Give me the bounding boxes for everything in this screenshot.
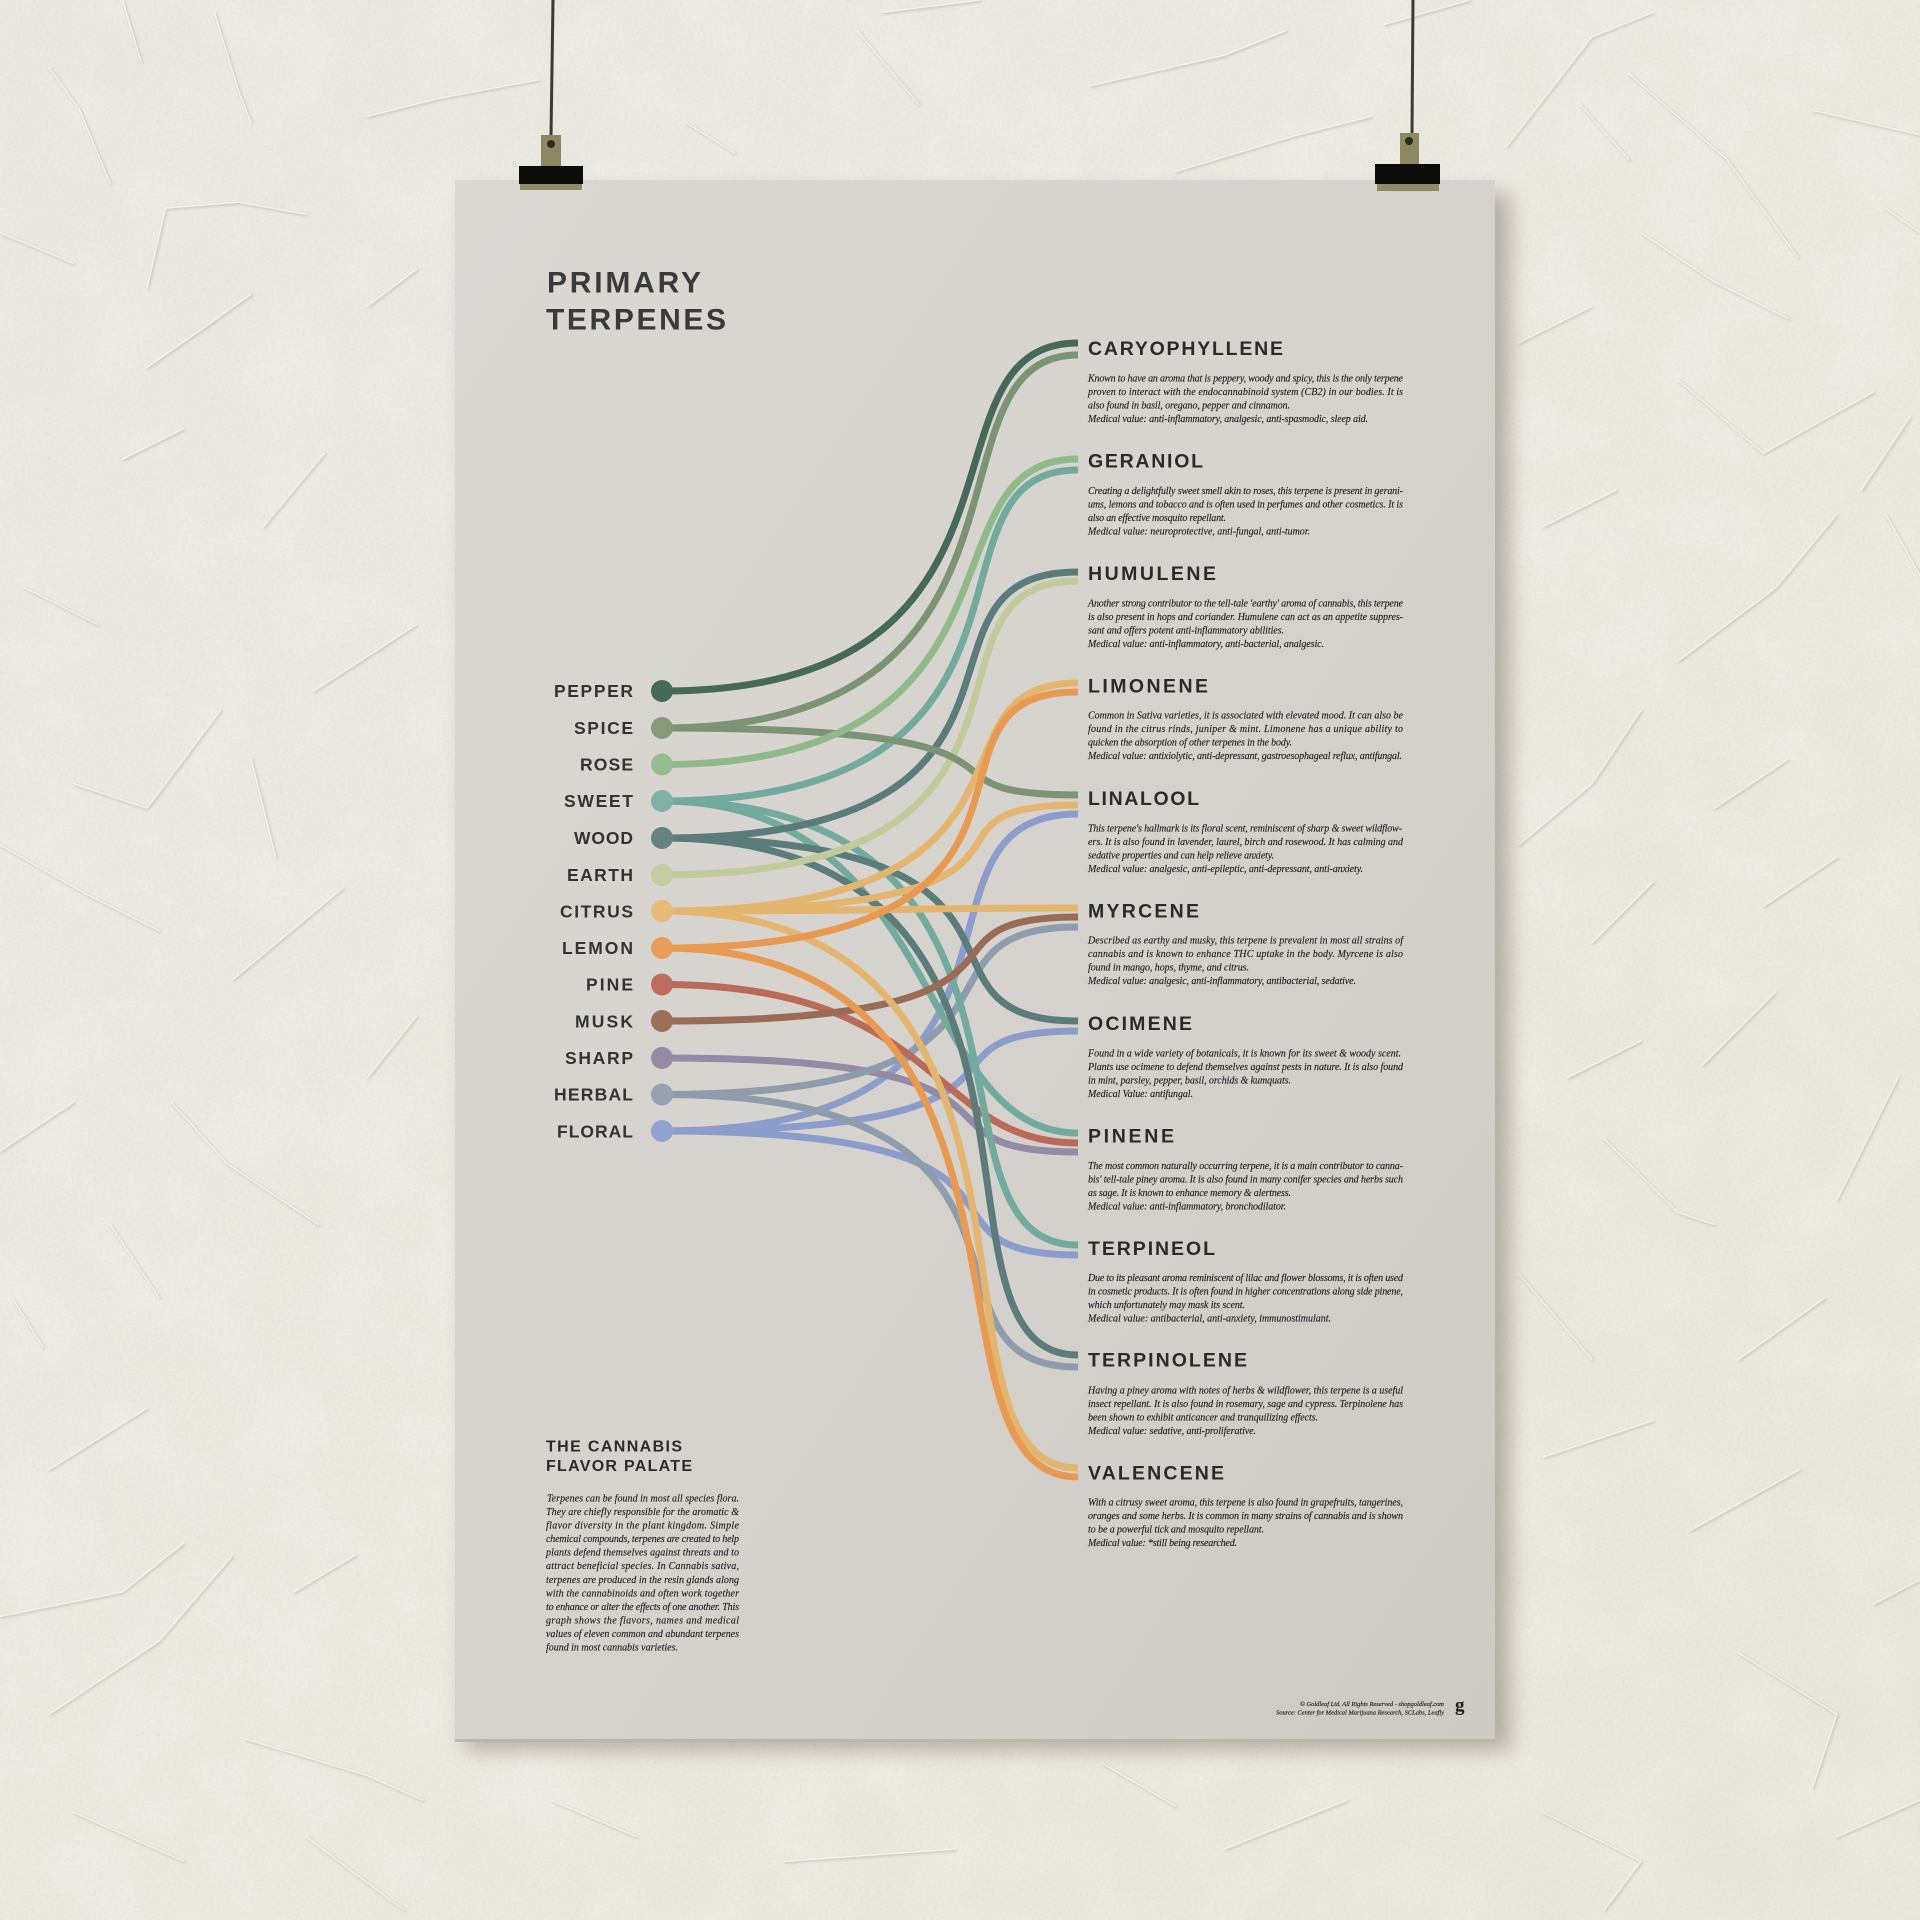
terpene: terpinolene: been shown to exhibit anticancer and tranquilizing effects.	[1088, 1412, 1318, 1424]
terpene: ocimene: Medical Value: antifungal.	[1087, 1089, 1193, 1100]
flavor labels: PINE	[586, 974, 633, 994]
terpene: humulene: Another strong contributor to the tell-tale 'earthy' aroma of cannabis, this terpene	[1087, 598, 1404, 610]
terpene: caryophyllene: Medical value: anti-inflammatory, analgesic, anti-spasmodic, sleep aid.	[1087, 414, 1368, 425]
terpene: terpinolene: Having a piney aroma with notes of herbs & wildflower, this terpene is a useful	[1087, 1386, 1403, 1396]
terpene: myrcene: MYRCENE	[1088, 900, 1199, 922]
terpene: terpinolene: Medical value: sedative, anti-proliferative.	[1087, 1426, 1256, 1437]
terpene: geraniol: GERANIOL	[1088, 450, 1203, 472]
flavor labels: PEPPER	[554, 681, 633, 701]
intro: the cannabis flavor palate: to enhance or alter the effects of one another. This	[546, 1602, 739, 1613]
terpene: linalool: This terpene's hallmark is its floral scent, reminiscent of sharp & sweet wildflow-	[1088, 824, 1402, 834]
terpene: valencene: to be a powerful tick and mosquito repellant.	[1088, 1524, 1264, 1536]
terpene: valencene	[1087, 1462, 1403, 1549]
terpene: humulene	[1087, 563, 1404, 650]
flavor labels	[554, 681, 633, 1141]
terpene: ocimene: in mint, parsley, pepper, basil, orchids & kumquats.	[1088, 1076, 1291, 1086]
terpene: geraniol: also an effective mosquito repellant.	[1088, 513, 1226, 524]
terpene: linalool: Medical value: analgesic, anti-epileptic, anti-depressant, anti-anxiety.	[1087, 864, 1363, 875]
terpene: myrcene: found in mango, hops, thyme, and citrus.	[1088, 962, 1249, 974]
terpene: terpinolene: insect repellant. It is also found in rosemary, sage and cypress. Terpinolene has	[1088, 1399, 1403, 1410]
terpene: terpineol: Medical value: antibacterial, anti-anxiety, immunostimulant.	[1087, 1314, 1331, 1324]
footer credits: © Goldleaf Ltd. All Rights Reserved - shopgoldleaf.com	[1300, 1701, 1444, 1708]
intro: the cannabis flavor palate: flavor diversity in the plant kingdom. Simple	[546, 1521, 740, 1532]
terpene: linalool: ers. It is also found in lavender, laurel, birch and rosewood. It has calming and	[1088, 837, 1404, 848]
intro: the cannabis flavor palate: values of eleven common and abundant terpenes	[546, 1629, 739, 1640]
intro: the cannabis flavor palate: plants defend themselves against threats and to	[545, 1548, 739, 1559]
flavor labels: WOOD	[574, 828, 633, 848]
footer credits	[1276, 1701, 1444, 1716]
terpene: terpinolene	[1087, 1349, 1403, 1437]
intro: the cannabis flavor palate	[545, 1438, 740, 1654]
terpene: caryophyllene: also found in basil, oregano, pepper and cinnamon.	[1088, 400, 1290, 412]
terpene: pinene	[1087, 1125, 1403, 1212]
terpene: terpineol	[1087, 1238, 1404, 1324]
terpene: pinene: as sage. It is known to enhance memory & alertness.	[1088, 1188, 1291, 1199]
terpene: caryophyllene: proven to interact with the endocannabinoid system (CB2) in our bodies. It is	[1087, 387, 1403, 398]
terpene: terpineol: TERPINEOL	[1088, 1238, 1215, 1260]
terpene: ocimene: Plants use ocimene to defend themselves against pests in nature. It is also found	[1087, 1062, 1404, 1073]
flavor labels: HERBAL	[554, 1084, 633, 1104]
flavor labels: LEMON	[562, 938, 633, 958]
terpene: pinene: Medical value: anti-inflammatory, bronchodilator.	[1087, 1202, 1286, 1212]
poster sheet	[455, 180, 1495, 1742]
terpene: myrcene: Medical value: analgesic, anti-inflammatory, antibacterial, sedative.	[1087, 976, 1356, 987]
footer credits: Source: Center for Medical Marijuana Research, SCLabs, Leafly	[1276, 1710, 1444, 1716]
flavor labels: EARTH	[567, 865, 633, 885]
terpene: myrcene: cannabis and is known to enhance THC uptake in the body. Myrcene is also	[1088, 949, 1403, 960]
terpene: geraniol: Creating a delightfully sweet smell akin to roses, this terpene is present in gerani-	[1088, 486, 1403, 497]
intro: the cannabis flavor palate: attract beneficial species. In Cannabis sativa,	[546, 1561, 739, 1572]
terpene: humulene: Medical value: anti-inflammatory, anti-bacterial, analgesic.	[1087, 639, 1324, 650]
flavor labels: MUSK	[575, 1011, 633, 1031]
terpene: humulene: HUMULENE	[1088, 563, 1216, 585]
terpene: limonene: quicken the absorption of other terpenes in the body.	[1088, 738, 1292, 748]
flavor to terpene flow curves	[662, 343, 1078, 1477]
terpene: terpineol: Due to its pleasant aroma reminiscent of lilac and flower blossoms, it is often used	[1087, 1273, 1404, 1284]
terpene: caryophyllene: Known to have an aroma that is peppery, woody and spicy, this is the only terpene	[1087, 374, 1404, 384]
terpene: valencene: oranges and some herbs. It is common in many strains of cannabis and is shown	[1088, 1511, 1403, 1522]
terpene: pinene: PINENE	[1088, 1125, 1174, 1147]
terpene: pinene: bis' tell-tale piney aroma. It is also found in many conifer species and herbs such	[1088, 1174, 1403, 1186]
intro: the cannabis flavor palate: found in most cannabis varieties.	[546, 1642, 678, 1654]
terpene: valencene: VALENCENE	[1088, 1462, 1224, 1484]
terpene: pinene: The most common naturally occurring terpene, it is a main contributor to canna-	[1088, 1161, 1403, 1172]
title: TERPENES	[546, 303, 726, 336]
terpene: terpineol: in cosmetic products. It is often found in higher concentrations along side pinene,	[1088, 1286, 1403, 1298]
terpene: caryophyllene	[1087, 338, 1404, 425]
intro: the cannabis flavor palate: FLAVOR PALATE	[546, 1458, 692, 1475]
title	[546, 266, 726, 336]
intro: the cannabis flavor palate: They are chiefly responsible for the aromatic &	[546, 1507, 739, 1518]
logo: g: g	[1455, 1695, 1465, 1716]
flavor labels: FLORAL	[557, 1121, 633, 1141]
terpene: limonene: LIMONENE	[1088, 675, 1208, 697]
terpene: humulene: sant and offers potent anti-inflammatory abilities.	[1088, 626, 1284, 636]
terpene: humulene: is also present in hops and coriander. Humulene can act as an appetite suppres-	[1088, 612, 1403, 623]
terpene: ocimene: OCIMENE	[1088, 1013, 1192, 1035]
terpene: myrcene: Described as earthy and musky, this terpene is prevalent in most all strains of	[1087, 936, 1404, 946]
terpene: limonene: Common in Sativa varieties, it is associated with elevated mood. It can also be	[1088, 710, 1404, 722]
terpene: ocimene	[1087, 1013, 1404, 1100]
terpene: geraniol: Medical value: neuroprotective, anti-fungal, anti-tumor.	[1087, 526, 1310, 538]
terpene: linalool: LINALOOL	[1088, 788, 1199, 810]
intro: the cannabis flavor palate: terpenes are produced in the resin glands along	[546, 1575, 739, 1586]
flavor labels: SWEET	[564, 791, 633, 811]
terpene: linalool	[1087, 788, 1404, 875]
intro: the cannabis flavor palate: THE CANNABIS	[546, 1438, 682, 1455]
terpene: ocimene: Found in a wide variety of botanicals, it is known for its sweet & woody scent.	[1087, 1048, 1401, 1060]
intro: the cannabis flavor palate: chemical compounds, terpenes are created to help	[546, 1534, 739, 1545]
intro: the cannabis flavor palate: graph shows the flavors, names and medical	[546, 1615, 739, 1626]
flavor labels: ROSE	[580, 754, 633, 774]
intro: the cannabis flavor palate: Terpenes can be found in most all species flora.	[547, 1494, 739, 1504]
terpene: limonene: Medical value: antixiolytic, anti-depressant, gastroesophageal reflux, antifungal.	[1087, 751, 1402, 762]
terpene: linalool: sedative properties and can help relieve anxiety.	[1088, 850, 1274, 862]
terpene: caryophyllene: CARYOPHYLLENE	[1088, 338, 1283, 360]
intro: the cannabis flavor palate: with the cannabinoids and often work together	[546, 1588, 739, 1599]
terpene: terpinolene: TERPINOLENE	[1088, 1349, 1247, 1371]
terpene: valencene: Medical value: *still being researched.	[1087, 1538, 1237, 1549]
flavor labels: CITRUS	[560, 901, 633, 921]
flavor dots	[651, 680, 673, 1142]
terpene: limonene	[1087, 675, 1404, 762]
terpene: terpineol: which unfortunately may mask its scent.	[1088, 1300, 1245, 1311]
terpene: geraniol: ums, lemons and tobacco and is often used in perfumes and other cosmetics. It is	[1088, 500, 1403, 510]
flavor labels: SHARP	[565, 1048, 633, 1068]
flavor labels: SPICE	[574, 718, 633, 738]
poster shadow	[466, 194, 1510, 1750]
left hanging clip	[519, 0, 583, 190]
title: PRIMARY	[547, 266, 701, 299]
terpene: valencene: With a citrusy sweet aroma, this terpene is also found in grapefruits, tangerines,	[1088, 1498, 1403, 1508]
right hanging clip	[1375, 0, 1440, 191]
terpene: limonene: found in the citrus rinds, juniper & mint. Limonene has a unique ability to	[1088, 724, 1403, 735]
terpene: geraniol	[1087, 450, 1403, 538]
terpene: myrcene	[1087, 900, 1404, 987]
